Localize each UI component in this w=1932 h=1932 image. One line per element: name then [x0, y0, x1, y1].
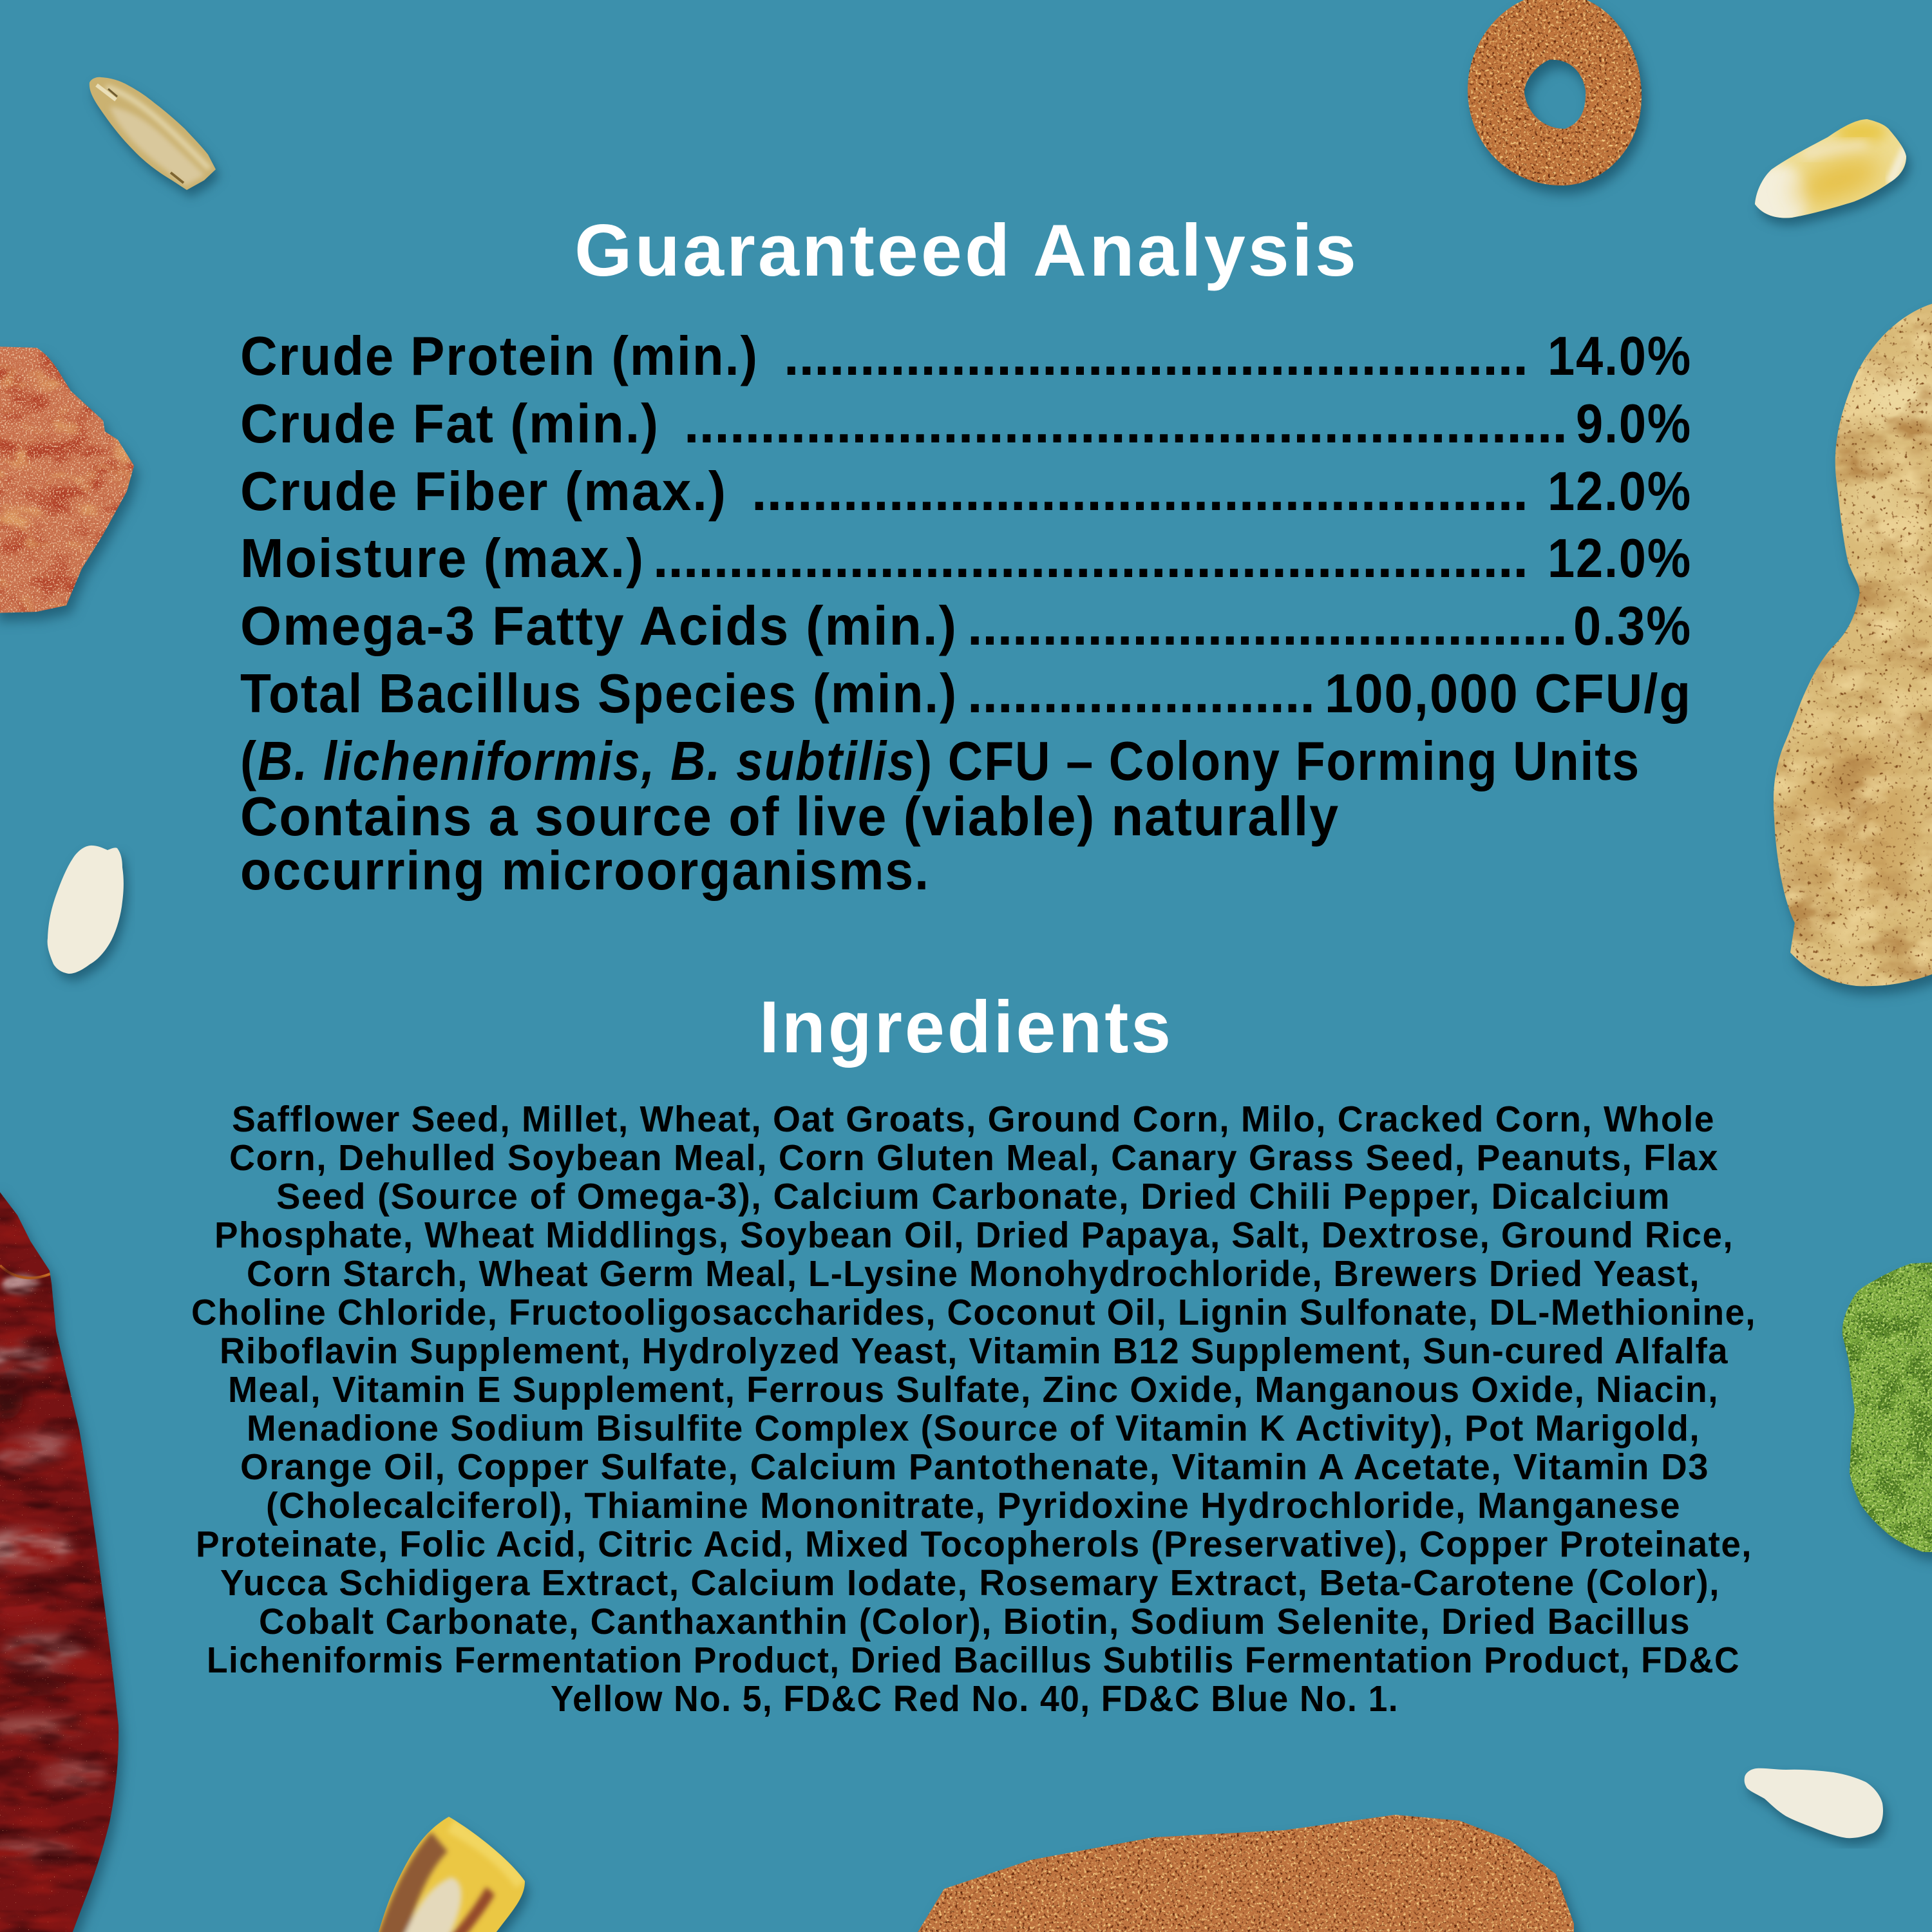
- ingredient photo: papaya chunk: [0, 346, 134, 613]
- text block: ingredients list: Yucca Schidigera Extract, Calcium Iodate, Rosemary Extract, Beta-Carotene (Color),: [220, 1562, 1720, 1604]
- row: total bacillus: [240, 663, 1692, 724]
- row: crude fiber: 12.0%: [1548, 461, 1692, 522]
- row: omega-3: 0.3%: [1573, 596, 1692, 657]
- row: crude fiber: Crude Fiber (max.): [240, 461, 727, 522]
- ingredient photo: peanut shell: [1765, 296, 1932, 992]
- ingredient photo: corn kernel top right: [1755, 119, 1914, 229]
- ingredient photo: biscuit pellet bottom: [914, 1815, 1574, 1932]
- note text: occurring microorganisms.: [240, 840, 930, 902]
- row: crude protein: [240, 326, 1692, 387]
- text block: ingredients list: Seed (Source of Omega-3), Calcium Carbonate, Dried Chili Pepper, Dicalcium: [276, 1176, 1671, 1217]
- note text: [240, 731, 1640, 902]
- ingredient photo: green pellet: [1842, 1262, 1932, 1552]
- row: moisture: 12.0%: [1548, 528, 1692, 589]
- text block: ingredients list: Choline Chloride, Fructooligosaccharides, Coconut Oil, Lignin Sulfonate, DL-Methionine,: [191, 1292, 1756, 1333]
- row: crude fat: ..........................................................: [684, 393, 1567, 455]
- text block: ingredients list: Safflower Seed, Millet, Wheat, Oat Groats, Ground Corn, Milo, Cracked Corn, Whole: [232, 1099, 1715, 1140]
- ingredient photo: white seed left: [48, 846, 124, 974]
- row: moisture: ..........................................................: [653, 528, 1528, 589]
- note text: (B. licheniformis, B. subtilis) CFU – Colony Forming Units: [240, 731, 1640, 792]
- row: omega-3: ........................................: [967, 596, 1567, 657]
- ingredient photo: white seed right: [1745, 1768, 1883, 1838]
- ingredient photo: safflower seed shell: [89, 77, 222, 200]
- note text: Contains a source of live (viable) naturally: [240, 786, 1340, 848]
- text block: ingredients list: Corn Starch, Wheat Germ Meal, L-Lysine Monohydrochloride, Brewers Dried Yeast,: [247, 1253, 1700, 1294]
- row: crude protein: Crude Protein (min.): [240, 326, 759, 387]
- text block: ingredients list: Phosphate, Wheat Middlings, Soybean Oil, Dried Papaya, Salt, Dextrose, Ground Rice,: [214, 1215, 1734, 1256]
- text block: ingredients list: Menadione Sodium Bisulfite Complex (Source of Vitamin K Activity), Pot Marigold,: [247, 1408, 1700, 1449]
- text block: ingredients list: Cobalt Carbonate, Canthaxanthin (Color), Biotin, Sodium Selenite, Dried Bacillus: [259, 1601, 1690, 1642]
- heading: Ingredients: Ingredients: [759, 987, 1173, 1068]
- row: total bacillus: Total Bacillus Species (min.): [240, 663, 958, 724]
- heading: Guaranteed Analysis: Guaranteed Analysis: [574, 210, 1359, 292]
- text block: ingredients list: Riboflavin Supplement, Hydrolyzed Yeast, Vitamin B12 Supplement, Sun-cured Alfalfa: [220, 1331, 1728, 1372]
- row: total bacillus: .......................: [967, 663, 1315, 724]
- row: moisture: [240, 528, 1692, 589]
- ingredient photo: corn kernel bottom: [379, 1817, 533, 1932]
- text block: ingredients list: Licheniformis Fermentation Product, Dried Bacillus Subtilis Fermentation Product, FD&C: [207, 1640, 1740, 1681]
- ingredient photo: red chili pepper: [0, 1179, 129, 1932]
- row: crude fat: Crude Fat (min.): [240, 393, 659, 455]
- ingredient photo: ring pellet: [1468, 0, 1642, 185]
- text block: ingredients list: Meal, Vitamin E Supplement, Ferrous Sulfate, Zinc Oxide, Manganous Oxide, Niacin,: [228, 1369, 1719, 1410]
- row: crude fiber: [240, 461, 1692, 522]
- text block: ingredients list: [191, 1099, 1756, 1719]
- panel: guaranteed analysis table: [240, 326, 1692, 902]
- row: crude fat: [240, 393, 1692, 455]
- row: crude fiber: ...................................................: [752, 461, 1528, 522]
- row: crude fat: 9.0%: [1576, 393, 1692, 455]
- row: crude protein: .................................................: [784, 326, 1528, 387]
- text block: ingredients list: Orange Oil, Copper Sulfate, Calcium Pantothenate, Vitamin A Acetate, Vitamin D3: [240, 1446, 1709, 1488]
- row: crude protein: 14.0%: [1548, 326, 1692, 387]
- text block: ingredients list: Proteinate, Folic Acid, Citric Acid, Mixed Tocopherols (Preservative), Copper Proteinate,: [196, 1524, 1752, 1565]
- row: moisture: Moisture (max.): [240, 528, 645, 589]
- row: omega-3: Omega-3 Fatty Acids (min.): [240, 596, 958, 657]
- text block: ingredients list: Yellow No. 5, FD&C Red No. 40, FD&C Blue No. 1.: [551, 1678, 1399, 1719]
- row: omega-3: [240, 596, 1692, 657]
- row: total bacillus: 100,000 CFU/g: [1325, 663, 1692, 724]
- text block: ingredients list: (Cholecalciferol), Thiamine Mononitrate, Pyridoxine Hydrochloride, Manganese: [266, 1485, 1681, 1526]
- text block: ingredients list: Corn, Dehulled Soybean Meal, Corn Gluten Meal, Canary Grass Seed, Peanuts, Flax: [229, 1137, 1719, 1179]
